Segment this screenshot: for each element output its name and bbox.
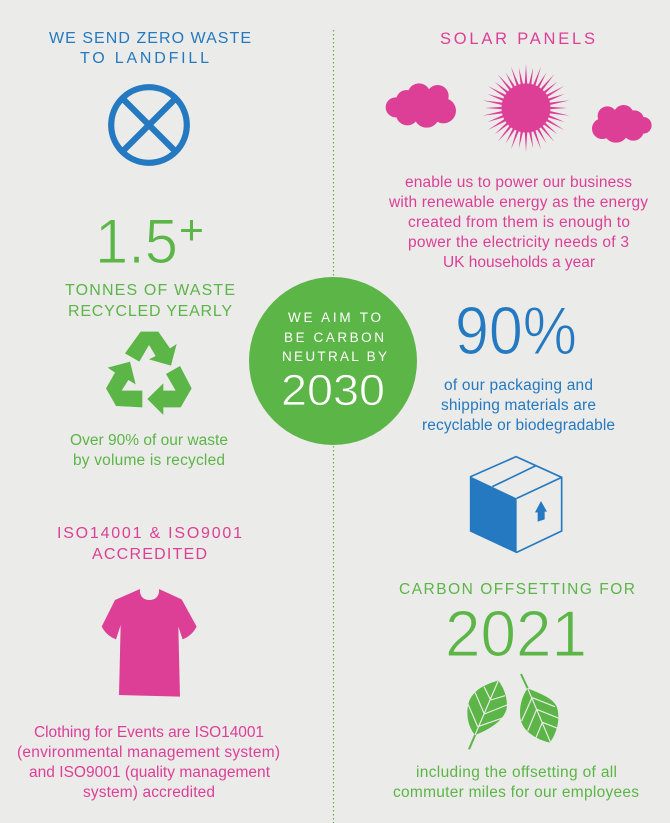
text: packaging description: recyclable or biodegradable <box>422 417 615 434</box>
text: solar panels description: enable us to power our business <box>405 174 632 191</box>
text: clothing accreditation <box>17 724 280 801</box>
heading: tonnes of waste recycled: TONNES OF WASTE <box>65 282 235 299</box>
text: carbon offsetting description: commuter miles for our employees <box>393 784 639 801</box>
heading: carbon offsetting: CARBON OFFSETTING FOR <box>399 581 635 598</box>
icon: leaves <box>467 674 559 749</box>
text: clothing accreditation: system) accredited <box>83 784 215 801</box>
text: solar panels description <box>388 174 648 271</box>
text: packaging description: of our packaging and <box>444 377 593 394</box>
heading: ISO accreditation <box>57 525 242 563</box>
icon: t-shirt <box>102 589 197 697</box>
badge: carbon neutral by 2030: BE CARBON <box>284 330 384 345</box>
text: recycled share: by volume is recycled <box>73 452 225 469</box>
text: clothing accreditation: (environmental management system) <box>17 744 280 761</box>
badge: carbon neutral by 2030: NEUTRAL BY <box>282 349 387 364</box>
text: solar panels description: UK households a year <box>443 254 595 271</box>
icon: sun <box>482 64 570 152</box>
icon: cardboard box <box>471 457 562 552</box>
badge: carbon neutral by 2030 <box>249 277 417 445</box>
text: packaging description <box>422 377 615 434</box>
stat: 1.5+ tonnes: 1.5 <box>95 207 178 277</box>
text: solar panels description: power the electricity needs of 3 <box>408 234 629 251</box>
text: clothing accreditation: and ISO9001 (quality management <box>29 764 271 781</box>
text: carbon offsetting description: including the offsetting of all <box>416 764 617 781</box>
stat: 2021: 2021 <box>445 597 587 670</box>
text: solar panels description: created from them is enough to <box>408 214 630 231</box>
badge: carbon neutral by 2030: WE AIM TO <box>288 310 381 325</box>
heading: zero waste to landfill: WE SEND ZERO WASTE <box>49 30 251 47</box>
heading: zero waste to landfill <box>49 30 251 67</box>
heading: tonnes of waste recycled: RECYCLED YEARLY <box>68 303 232 320</box>
icon: right cloud <box>592 105 652 143</box>
icon: left cloud <box>386 83 456 128</box>
heading: ISO accreditation: ISO14001 & ISO9001 <box>57 525 242 542</box>
badge: carbon neutral by 2030: 2030 <box>281 366 385 415</box>
text: recycled share: Over 90% of our waste <box>70 432 228 449</box>
heading: ISO accreditation: ACCREDITED <box>92 546 207 563</box>
text: packaging description: shipping materials are <box>441 397 596 414</box>
text: recycled share <box>70 432 228 469</box>
heading: tonnes of waste recycled <box>65 282 235 320</box>
heading: solar panels: SOLAR PANELS <box>440 30 595 48</box>
icon: recycling arrows <box>106 332 192 415</box>
stat: 1.5+ tonnes: + <box>179 206 204 253</box>
stat: 90%: 90% <box>455 293 577 369</box>
text: clothing accreditation: Clothing for Events are ISO14001 <box>34 724 264 741</box>
text: solar panels description: with renewable energy as the energy <box>388 194 648 211</box>
text: carbon offsetting description <box>393 764 639 801</box>
heading: zero waste to landfill: TO LANDFILL <box>80 50 209 67</box>
icon: crossed circle <box>111 87 187 163</box>
